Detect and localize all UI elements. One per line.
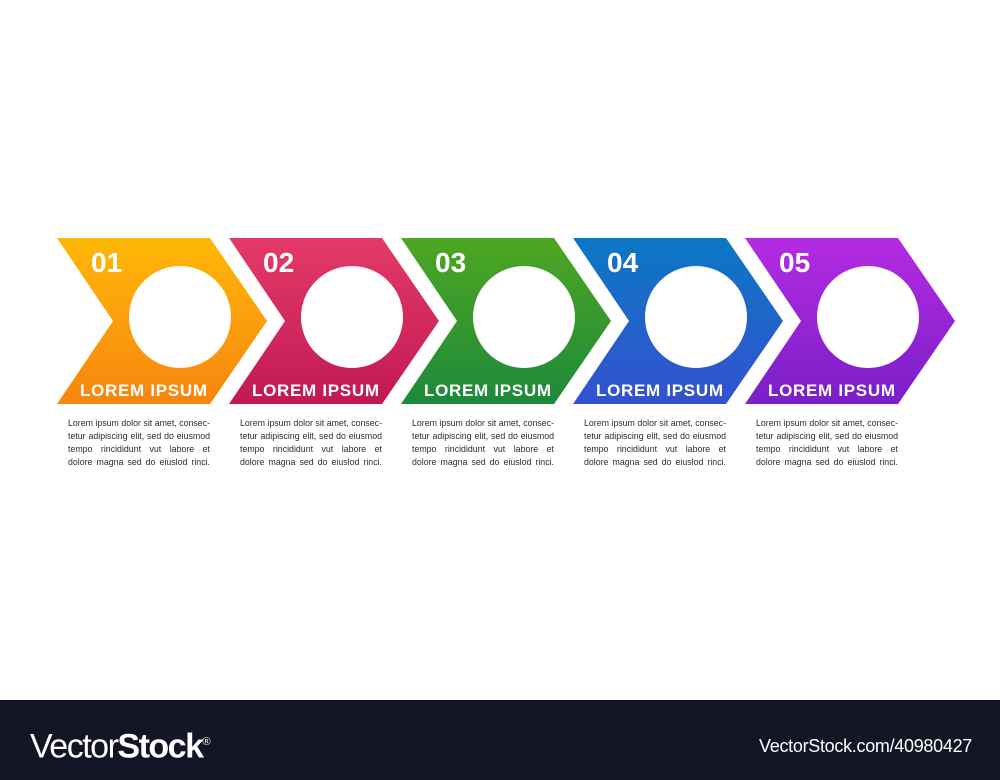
footer url: VectorStock.com/40980427 bbox=[759, 736, 972, 756]
step 03: 03 bbox=[435, 247, 466, 278]
text block 05: tempo rincididunt vut labore et bbox=[756, 444, 898, 454]
text block 02: Lorem ipsum dolor sit amet, consec- bbox=[240, 418, 382, 428]
text block 03 bbox=[412, 418, 554, 467]
text block 03: Lorem ipsum dolor sit amet, consec- bbox=[412, 418, 554, 428]
step 04: LOREM IPSUM bbox=[596, 381, 723, 400]
step 04 bbox=[573, 238, 783, 404]
text block 02: tetur adipiscing elit, sed do eiusmod bbox=[240, 431, 382, 441]
text block 05: tetur adipiscing elit, sed do eiusmod bbox=[756, 431, 898, 441]
text block 05: Lorem ipsum dolor sit amet, consec- bbox=[756, 418, 898, 428]
step 04: 04 bbox=[607, 247, 639, 278]
text block 01: Lorem ipsum dolor sit amet, consec- bbox=[68, 418, 210, 428]
chevron steps graphic bbox=[57, 238, 955, 404]
step 05: LOREM IPSUM bbox=[768, 381, 895, 400]
step 01: 01 bbox=[91, 247, 122, 278]
text block 02 bbox=[240, 418, 382, 467]
text block 04: tempo rincididunt vut labore et bbox=[584, 444, 726, 454]
text block 04: tetur adipiscing elit, sed do eiusmod bbox=[584, 431, 726, 441]
footer logo: VectorStock® bbox=[30, 727, 209, 765]
text block 01: dolore magna sed do eiuslod rinci. bbox=[68, 457, 210, 467]
footer bar bbox=[0, 700, 1000, 780]
step 03 bbox=[401, 238, 611, 404]
step 01: LOREM IPSUM bbox=[80, 381, 207, 400]
step 01 bbox=[57, 238, 267, 404]
step 05: 05 bbox=[779, 247, 810, 278]
text block 05 bbox=[756, 418, 898, 467]
text block 01: tempo rincididunt vut labore et bbox=[68, 444, 210, 454]
text block 02: tempo rincididunt vut labore et bbox=[240, 444, 382, 454]
text block 03: dolore magna sed do eiuslod rinci. bbox=[412, 457, 554, 467]
text block 03: tempo rincididunt vut labore et bbox=[412, 444, 554, 454]
text block 01 bbox=[68, 418, 210, 467]
text block 03: tetur adipiscing elit, sed do eiusmod bbox=[412, 431, 554, 441]
text block 02: dolore magna sed do eiuslod rinci. bbox=[240, 457, 382, 467]
text block 04: dolore magna sed do eiuslod rinci. bbox=[584, 457, 726, 467]
text block 04 bbox=[584, 418, 726, 467]
text block 04: Lorem ipsum dolor sit amet, consec- bbox=[584, 418, 726, 428]
text block 01: tetur adipiscing elit, sed do eiusmod bbox=[68, 431, 210, 441]
step 05 bbox=[745, 238, 955, 404]
step 02 bbox=[229, 238, 439, 404]
step 02: 02 bbox=[263, 247, 294, 278]
step 02: LOREM IPSUM bbox=[252, 381, 379, 400]
step 03: LOREM IPSUM bbox=[424, 381, 551, 400]
text block 05: dolore magna sed do eiuslod rinci. bbox=[756, 457, 898, 467]
